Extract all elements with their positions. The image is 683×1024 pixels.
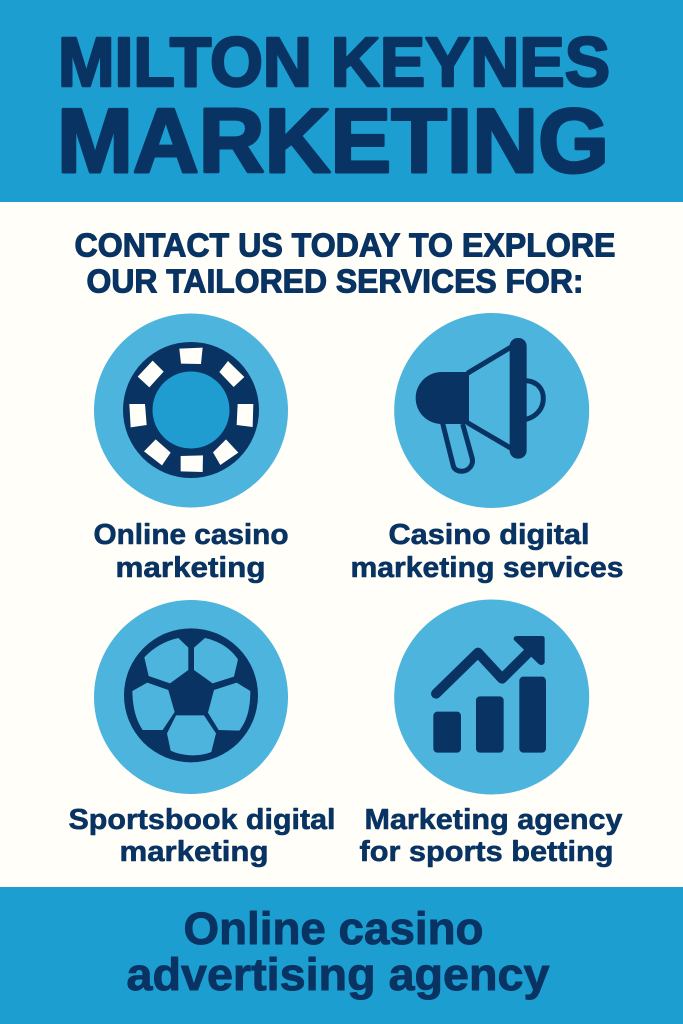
- label: marketing agency for sports betting: Marketing agency: [364, 804, 622, 836]
- footer band: [0, 887, 683, 1024]
- header band: [0, 0, 683, 202]
- title: MILTON KEYNES: [58, 23, 610, 101]
- footer text: advertising agency: [126, 949, 550, 1000]
- label: sportsbook digital marketing: marketing: [120, 836, 268, 868]
- label: casino digital marketing services: Casino digital: [388, 519, 590, 551]
- label: marketing agency for sports betting: for sports betting: [360, 836, 614, 868]
- icon: megaphone: [394, 313, 589, 508]
- panel: marketing agency for sports betting: [360, 600, 622, 868]
- subheading: [74, 228, 616, 300]
- footer text: [126, 903, 550, 1000]
- label: online casino marketing: marketing: [116, 552, 266, 584]
- title: [57, 23, 610, 192]
- icon: growth chart: [394, 600, 589, 794]
- title: MARKETING: [57, 91, 609, 192]
- label: marketing agency for sports betting: [360, 804, 622, 868]
- icon: soccer ball: [94, 600, 288, 794]
- label: casino digital marketing services: [350, 519, 624, 584]
- subheading: CONTACT US TODAY TO EXPLORE: [74, 228, 616, 264]
- label: casino digital marketing services: marketing services: [350, 552, 624, 584]
- panel: online casino marketing: [94, 314, 288, 584]
- subheading: OUR TAILORED SERVICES FOR:: [86, 264, 584, 300]
- label: online casino marketing: [94, 519, 288, 584]
- icon: casino chip: [94, 314, 288, 508]
- label: sportsbook digital marketing: Sportsbook digital: [68, 804, 336, 836]
- panel: sportsbook digital marketing: [68, 600, 336, 868]
- panel: casino digital marketing services: [350, 313, 624, 584]
- label: sportsbook digital marketing: [68, 804, 336, 868]
- label: online casino marketing: Online casino: [94, 519, 288, 551]
- footer text: Online casino: [184, 903, 484, 954]
